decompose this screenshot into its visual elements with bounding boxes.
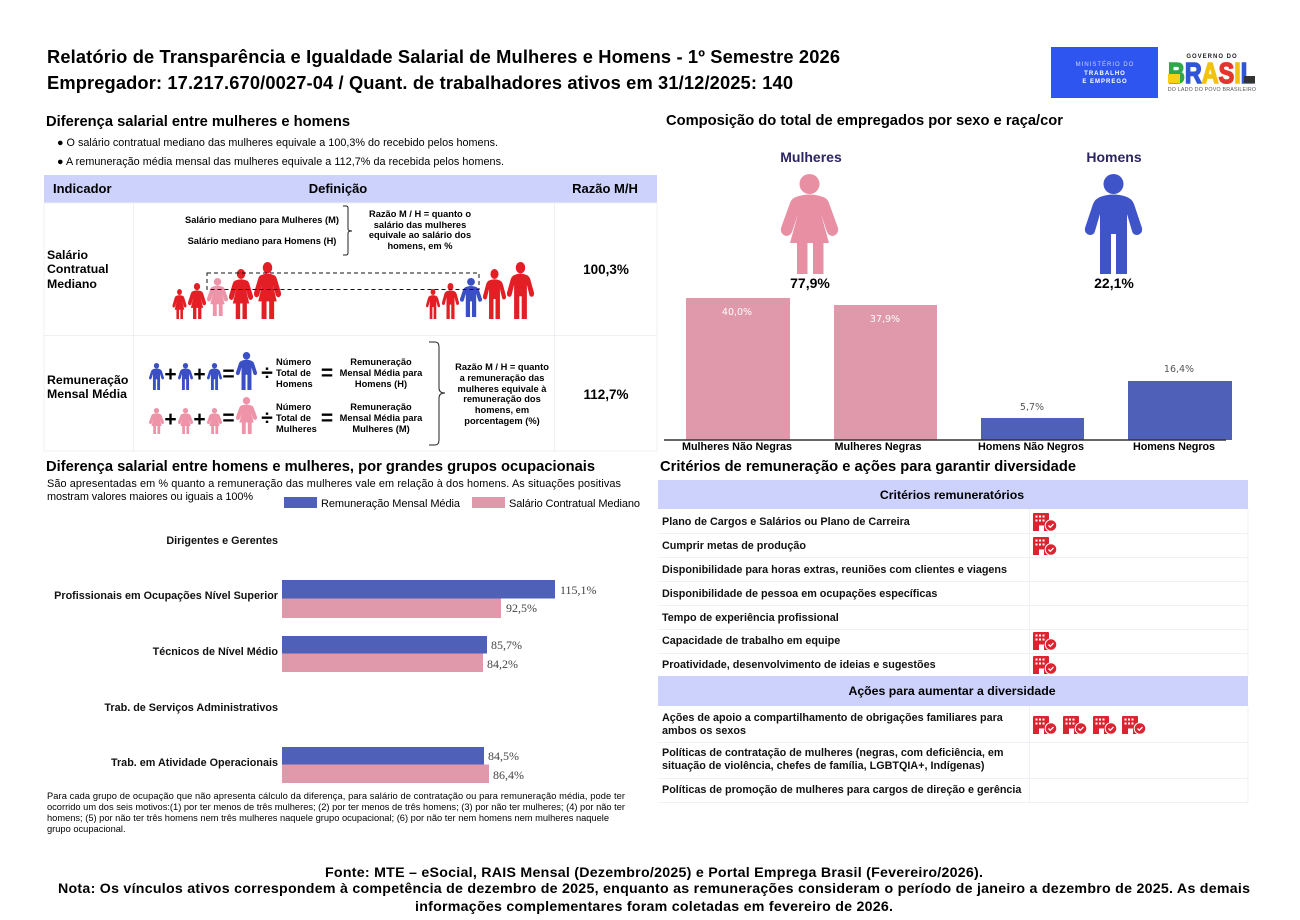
key findings text: ● O salário contratual mediano das mulheres equivale a 100,3% do recebido pelos homens. [57, 137, 498, 149]
definição: razão remuneração [429, 342, 549, 445]
header: ações para aumentar a diversidade: Ações para aumentar a diversidade [848, 684, 1056, 698]
definição: salário mediano: equivale ao salário dos [369, 230, 471, 240]
group: profissionais nível superior: 115,1% [560, 583, 597, 597]
equação: mulheres: Total de [276, 413, 311, 423]
footnote: homens; (5) por não ter três homens nem três mulheres naquele grupo ocupacional; (6) por não ter nem homens nem mulheres naquele [47, 813, 609, 823]
pictograma: homens 22,1%: Homens [1086, 149, 1142, 165]
bar: mulheres não negras: 40,0% [722, 307, 752, 318]
definição: razão remuneração: Razão M / H = quanto [455, 362, 549, 372]
equação: mulheres [149, 397, 423, 434]
equação: homens: ÷ [261, 362, 273, 385]
definição: razão remuneração: a remuneração das [460, 373, 544, 383]
equação: homens [149, 352, 423, 390]
definição: razão remuneração: homens, em [475, 405, 529, 415]
ação: promoção de mulheres: Políticas de promoção de mulheres para cargos de direção e gerência [662, 784, 1022, 796]
row label: salário contratual mediano: Salário [47, 248, 88, 262]
definição: salário mediano: Salário mediano para Homens (H) [188, 236, 336, 246]
group: profissionais nível superior [54, 580, 597, 618]
pictograma: mulheres 77,9%: Mulheres [780, 149, 842, 165]
heading: critérios: Critérios de remuneração e ações para garantir diversidade [660, 459, 1076, 475]
critério: metas de produção: Cumprir metas de produção [662, 540, 806, 552]
bar: mulheres negras: 37,9% [870, 314, 900, 325]
legend: Remuneração Mensal Média [321, 498, 461, 510]
heading: grupos ocupacionais: Diferença salarial entre homens e mulheres, por grandes grupos ocupacionais [46, 459, 595, 475]
equação: homens: Homens [276, 379, 313, 389]
definição: salário mediano: Razão M / H = quanto o [369, 209, 471, 219]
critério: proatividade: Proatividade, desenvolvimento de ideias e sugestões [662, 659, 936, 671]
group: profissionais nível superior: 92,5% [506, 601, 537, 615]
header: ações para aumentar a diversidade [658, 676, 1248, 706]
equação: mulheres: Número [276, 402, 311, 412]
panel: critérios e ações [658, 480, 1248, 802]
ação: contratação de mulheres: Políticas de contratação de mulheres (negras, com deficiência, em [662, 747, 1003, 759]
footer: fonte e nota [58, 865, 1250, 915]
ação: obrigações familiares: Ações de apoio a compartilhamento de obrigações familiares para [662, 712, 1004, 724]
critério: plano de cargos: Plano de Cargos e Salários ou Plano de Carreira [662, 516, 911, 528]
equação: homens: Homens (H) [355, 379, 407, 389]
icon: fila de homens [426, 262, 534, 319]
header: critérios remuneratórios: Critérios remuneratórios [880, 488, 1024, 502]
footnote: grupo ocupacional. [47, 824, 126, 834]
row label: remuneração mensal média: Remuneração [47, 373, 129, 387]
chart description: mostram valores maiores ou iguais a 100% [47, 491, 253, 503]
value: 100,3%: 100,3% [583, 262, 629, 277]
bar: homens não negros: 5,7% [1020, 402, 1044, 413]
equação: mulheres: Mensal Média para [340, 413, 423, 423]
group: atividade operacionais: 86,4% [493, 768, 524, 782]
bar: mulheres negras [834, 305, 937, 453]
pictograma: homens 22,1%: 22,1% [1094, 275, 1134, 291]
equação: mulheres: + [193, 408, 206, 431]
group: atividade operacionais: Trab. em Atividade Operacionais [111, 757, 278, 769]
definição: salário mediano [185, 206, 471, 255]
definição: razão remuneração: porcentagem (%) [464, 416, 540, 426]
key findings text [57, 137, 504, 168]
ação: contratação de mulheres [662, 747, 1003, 772]
panel: tabela de indicadores [44, 175, 657, 451]
row label: salário contratual mediano: Contratual [47, 262, 108, 276]
ação: obrigações familiares [662, 712, 1146, 737]
equação: homens: Total de [276, 368, 311, 378]
equação: mulheres: Remuneração [350, 402, 412, 412]
group: atividade operacionais [111, 747, 524, 783]
definição: salário mediano: Salário mediano para Mulheres (M) [185, 215, 339, 225]
critério: ocupações específicas: Disponibilidade de pessoa em ocupações específicas [662, 588, 937, 600]
bar: homens negros [1128, 364, 1232, 453]
title: Relatório de Transparência e Igualdade Salarial de Mulheres e Homens - 1º Semestre 2026 [47, 46, 840, 67]
table header: Indicador [53, 181, 112, 196]
footer: fonte e nota: informações complementares foram coletadas em fevereiro de 2026. [415, 899, 893, 915]
equação: mulheres: Mulheres (M) [352, 424, 410, 434]
legend: Salário Contratual Mediano [509, 498, 640, 510]
key findings text: ● A remuneração média mensal das mulheres equivale a 112,7% da recebida pelos homens. [57, 156, 504, 168]
group: técnicos de nível médio: 84,2% [487, 657, 518, 671]
definição: razão remuneração: mulheres equivale à [458, 384, 547, 394]
title [47, 46, 840, 93]
bar: homens não negros: Homens Não Negros [978, 441, 1084, 453]
pictograma: mulheres 77,9%: 77,9% [790, 275, 830, 291]
chart description [47, 478, 622, 503]
footnote [47, 791, 625, 834]
footnote: ocorrido um dos seis motivos:(1) por ter menos de três mulheres; (2) por ter menos de três homens; (3) por não ter mulheres; (4) por não ter [47, 802, 625, 812]
chart description: São apresentadas em % quanto a remuneração das mulheres vale em relação à dos homens. As situações positivas [47, 478, 622, 490]
critério: trabalho em equipe [662, 632, 1057, 650]
equação: mulheres: Mulheres [276, 424, 317, 434]
row label: salário contratual mediano [47, 248, 108, 291]
bar: homens negros: Homens Negros [1133, 441, 1215, 453]
group: técnicos de nível médio [153, 636, 522, 672]
group: profissionais nível superior: Profissionais em Ocupações Nível Superior [54, 590, 279, 602]
critério: metas de produção [662, 537, 1057, 555]
heading: composição: Composição do total de empregados por sexo e raça/cor [666, 113, 1063, 129]
equação: homens: = [222, 363, 235, 386]
logo: Governo do Brasil: BRASIL [1168, 58, 1255, 90]
logo: Governo do Brasil: DO LADO DO POVO BRASILEIRO [1168, 87, 1256, 93]
logo: Ministério do Trabalho e Emprego: MINISTÉRIO DO [1076, 61, 1134, 68]
logo: Ministério do Trabalho e Emprego: TRABALHO [1084, 71, 1126, 77]
ação: obrigações familiares: ambos os sexos [662, 725, 746, 737]
footer: fonte e nota: Fonte: MTE – eSocial, RAIS Mensal (Dezembro/2025) e Portal Emprega Brasil (Fevereiro/2026). [325, 865, 983, 881]
critério: plano de cargos [662, 513, 1057, 531]
equação: homens: Remuneração [350, 357, 412, 367]
title: Empregador: 17.217.670/0027-04 / Quant. de trabalhadores ativos em 31/12/2025: 140 [47, 72, 793, 93]
equação: mulheres: = [222, 407, 235, 430]
equação: homens: = [321, 362, 333, 385]
heading: diferença salarial: Diferença salarial entre mulheres e homens [46, 114, 350, 130]
logo: Ministério do Trabalho e Emprego: E EMPREGO [1082, 79, 1128, 85]
table header [53, 181, 638, 196]
group: técnicos de nível médio: 85,7% [491, 638, 522, 652]
bar: mulheres negras: Mulheres Negras [834, 441, 922, 453]
bar: homens negros: 16,4% [1164, 364, 1194, 375]
bar chart: grupos ocupacionais [54, 535, 597, 783]
group: atividade operacionais: 84,5% [488, 749, 519, 763]
equação: homens: Mensal Média para [340, 368, 423, 378]
equação: homens: + [164, 363, 177, 386]
row label: salário contratual mediano: Mediano [47, 277, 97, 291]
definição: salário mediano: salário das mulheres [374, 220, 466, 230]
header: critérios remuneratórios [658, 480, 1248, 509]
definição: salário mediano: homens, em % [387, 241, 453, 251]
table header: Definição [309, 181, 367, 196]
row label: remuneração mensal média [47, 373, 129, 401]
row label: remuneração mensal média: Mensal Média [47, 387, 127, 401]
definição: razão remuneração: remuneração dos [463, 394, 541, 404]
group: serviços administrativos: Trab. de Serviços Administrativos [104, 702, 278, 714]
bar: homens não negros [978, 402, 1084, 453]
bar: mulheres não negras [682, 298, 792, 453]
bar: mulheres não negras: Mulheres Não Negras [682, 441, 792, 453]
table header: Razão M/H [572, 181, 638, 196]
logo: Governo do Brasil: GOVERNO DO [1186, 54, 1238, 60]
equação: mulheres: + [164, 408, 177, 431]
equação: mulheres: ÷ [261, 407, 273, 430]
bar chart: composição por sexo e raça/cor [664, 298, 1232, 453]
critério: proatividade [662, 656, 1057, 674]
critério: trabalho em equipe: Capacidade de trabalho em equipe [662, 635, 840, 647]
critério: horas extras: Disponibilidade para horas extras, reuniões com clientes e viagens [662, 564, 1007, 576]
equação: mulheres: = [321, 407, 333, 430]
group: técnicos de nível médio: Técnicos de Nível Médio [153, 646, 278, 658]
critério: experiência: Tempo de experiência profissional [662, 612, 839, 624]
value: 112,7%: 112,7% [583, 387, 629, 402]
icon: fila de mulheres [172, 262, 281, 319]
footer: fonte e nota: Nota: Os vínculos ativos correspondem à competência de dezembro de 2025, enquanto as remunerações consideram o período de janeiro a dezembro de 2025. As demais [58, 881, 1250, 897]
group: dirigentes e gerentes: Dirigentes e Gerentes [166, 535, 278, 547]
legend [284, 497, 640, 510]
logo: Ministério do Trabalho e Emprego [1051, 47, 1158, 98]
ação: contratação de mulheres: situação de violência, chefes de família, LGBTQIA+, Indígenas) [662, 760, 985, 772]
pictograma: homens 22,1% [1085, 149, 1142, 291]
equação: homens: Número [276, 357, 311, 367]
pictograma: mulheres 77,9% [780, 149, 842, 291]
footnote: Para cada grupo de ocupação que não apresenta cálculo da diferença, para salário de contratação ou para remuneração média, pode ter [47, 791, 625, 801]
equação: homens: + [193, 363, 206, 386]
